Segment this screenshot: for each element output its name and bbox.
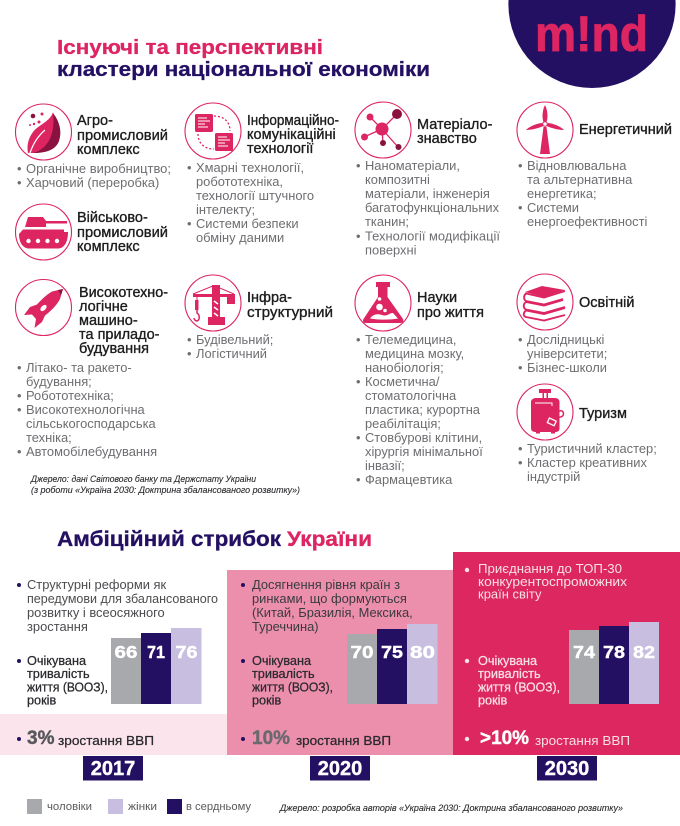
source note: clusters: (з роботи «Україна 2030: Доктрина збалансованого розвитку») xyxy=(31,485,300,495)
stat: GDP 10% xyxy=(241,728,391,749)
icon: tank xyxy=(16,204,72,260)
icon: suitcase xyxy=(517,384,573,440)
bar chart: 2030: 74 xyxy=(573,642,595,662)
icon: wind turbine xyxy=(517,102,573,158)
list: infrastructure items: • xyxy=(187,332,192,347)
list: materials items: матеріали, інженерія xyxy=(365,186,490,201)
text: emerging markets: ринками, що формуються xyxy=(252,591,407,606)
year: 2020: 2020 xyxy=(318,758,362,780)
list: life sciences items: • xyxy=(356,374,361,389)
stat: GDP 3%: зростання ВВП xyxy=(58,734,154,748)
list: agro items: • xyxy=(17,175,22,190)
stat: GDP 3% xyxy=(17,728,154,749)
heading: energy: Енергетичний xyxy=(579,122,672,138)
list: high-tech items: техніка; xyxy=(26,430,72,445)
text: life expectancy 2017: років xyxy=(27,694,56,708)
heading: tourism: Туризм xyxy=(579,406,627,422)
list: materials items: • xyxy=(356,228,361,244)
list: energy items: • xyxy=(518,200,523,215)
list: ICT items: обміну даними xyxy=(196,230,284,245)
text: life expectancy 2020: років xyxy=(252,694,281,708)
panel: energy cluster xyxy=(517,102,672,229)
bullet: reforms xyxy=(17,583,21,587)
list: life sciences items: хірургія мінімальної xyxy=(365,444,483,459)
list: energy items: Системи xyxy=(527,200,579,215)
list: tourism items: Туристичний кластер; xyxy=(527,441,657,456)
list: agro items: Органічне виробництво; xyxy=(26,161,171,176)
source note: leap: Джерело: розробка авторів «Україна 2030: Доктрина збалансованого розвитку» xyxy=(279,803,623,813)
year: 2020 xyxy=(310,756,370,780)
list: high-tech items: • xyxy=(17,402,22,417)
stat: GDP 10%: 10% xyxy=(252,728,290,749)
text: reforms: Структурні реформи як xyxy=(27,577,166,592)
heading: infrastructure: структурний xyxy=(247,305,333,321)
title: clusters xyxy=(57,36,430,81)
source note: clusters: Джерело: дані Світового банку та Держстату України xyxy=(30,474,256,484)
list: tourism items: • xyxy=(518,441,523,456)
icon: rocket xyxy=(16,280,72,336)
bullet: emerging markets xyxy=(241,583,245,587)
heading: ambitious leap: Амбіційний стрибок xyxy=(57,528,282,551)
list: ICT items: інтелекту; xyxy=(196,202,255,217)
icon: documents xyxy=(185,103,241,159)
list: materials items: багатофункціональних xyxy=(365,200,500,215)
bullet: life expectancy 2030 xyxy=(465,659,469,663)
list: high-tech items: сільськогосподарська xyxy=(26,416,157,431)
panel: 2020 xyxy=(227,570,453,755)
text: life expectancy 2017: Очікувана xyxy=(27,654,87,668)
list: materials items: поверхні xyxy=(365,242,416,258)
list: materials items: композитні xyxy=(365,172,430,187)
panel: 2030 xyxy=(453,552,680,755)
heading: infrastructure: Інфра- xyxy=(247,290,292,306)
bar chart: 2017 xyxy=(111,628,202,704)
list: life sciences items: • xyxy=(356,472,361,487)
logo: mind: m!nd xyxy=(535,6,648,62)
bar chart: 2017: 76 xyxy=(176,642,198,662)
text: reforms: передумови для збалансованого xyxy=(27,591,218,606)
list: education items: Дослідницькі xyxy=(527,332,604,347)
bar chart: 2017: 66 xyxy=(114,642,138,662)
list: education items: університети; xyxy=(527,346,607,361)
panel: materials science cluster xyxy=(355,102,500,258)
text: life expectancy 2017: життя (ВООЗ), xyxy=(27,680,108,694)
list: infrastructure items: Будівельний; xyxy=(196,332,273,347)
icon: books xyxy=(517,274,573,330)
bullet: life expectancy 2020 xyxy=(241,659,245,663)
panel: military-industrial cluster xyxy=(16,204,168,260)
list: life sciences items: реабілітація; xyxy=(365,416,441,431)
stat: GDP 3%: 3% xyxy=(27,728,55,749)
list: high-tech items: • xyxy=(17,360,22,375)
heading: materials: знавство xyxy=(417,131,477,147)
icon: flask xyxy=(355,275,411,331)
list: high-tech items: Високотехнологічна xyxy=(26,402,146,417)
heading: military: промисловий xyxy=(77,225,168,241)
text: reforms: зростання xyxy=(27,619,88,634)
list: education items: • xyxy=(518,332,523,347)
legend: жінки xyxy=(128,801,157,813)
list: life sciences items: • xyxy=(356,332,361,347)
panel: life sciences cluster xyxy=(355,275,484,487)
logo: mind xyxy=(508,0,676,88)
stat: GDP over 10%: >10% xyxy=(480,728,529,749)
list: life sciences items: нанобіологія; xyxy=(365,360,444,375)
list: education items: • xyxy=(518,360,523,375)
list: materials items: • xyxy=(356,158,361,173)
list: infrastructure items: Логістичний xyxy=(196,346,267,361)
panel: ICT cluster xyxy=(185,103,339,245)
text: top 30: Приєднання до ТОП-30 xyxy=(478,561,622,576)
list: education items: Бізнес-школи xyxy=(527,360,607,375)
list: agro items: • xyxy=(17,161,22,176)
icon: molecule xyxy=(355,102,411,158)
list: energy items: Відновлювальна xyxy=(527,158,627,173)
list: ICT items: технології штучного xyxy=(196,188,314,203)
icon: crane xyxy=(185,275,241,331)
heading: materials: Матеріало- xyxy=(417,117,493,133)
heading: life sciences: Науки xyxy=(417,290,457,306)
heading: life sciences: про життя xyxy=(417,305,484,321)
heading: military: Військово- xyxy=(77,210,148,226)
list: life sciences items: інвазії; xyxy=(365,458,405,473)
list: ICT items: • xyxy=(187,216,192,231)
list: life sciences items: пластика; курортна xyxy=(365,402,481,417)
text: reforms: розвитку і всеосяжного xyxy=(27,605,165,620)
legend: чоловіки xyxy=(47,801,92,813)
list: life sciences items: Стовбурові клітини, xyxy=(365,430,482,445)
legend: в сердньому xyxy=(186,801,251,813)
stat: GDP over 10%: зростання ВВП xyxy=(535,733,630,748)
bar chart: 2020: 70 xyxy=(350,642,374,662)
stat: GDP 10%: зростання ВВП xyxy=(296,734,391,748)
panel: education cluster xyxy=(517,274,634,375)
list: high-tech items: будування; xyxy=(26,374,92,389)
year: 2030: 2030 xyxy=(545,758,589,780)
year: 2017 xyxy=(83,756,143,780)
heading: high-tech: логічне xyxy=(79,299,128,315)
list: energy items: • xyxy=(518,158,523,173)
bar chart: 2020 xyxy=(347,624,438,704)
list: high-tech items: Автомобілебудування xyxy=(26,444,157,459)
heading: ICT: технології xyxy=(247,141,313,157)
list: energy items: енергетика; xyxy=(527,186,597,201)
text: emerging markets: (Китай, Бразилія, Мексика, xyxy=(252,605,413,620)
list: ICT items: Системи безпеки xyxy=(196,216,299,231)
bar chart: 2030: 82 xyxy=(633,642,655,662)
bar chart: 2017: 71 xyxy=(147,642,165,662)
bullet: life expectancy xyxy=(17,659,21,663)
bar chart: 2020: 75 xyxy=(381,642,403,662)
heading: ICT: Інформаційно- xyxy=(247,113,339,129)
list: life sciences items: Фармацевтика xyxy=(365,472,453,487)
heading: agro: промисловий xyxy=(77,128,168,144)
bullet: top 30 xyxy=(465,568,469,572)
legend xyxy=(27,799,251,814)
list: tourism items: індустрій xyxy=(527,469,580,484)
heading: high-tech: Високотехно- xyxy=(79,285,168,301)
icon: leaf xyxy=(16,104,72,160)
band: GDP 2017 xyxy=(0,714,227,755)
list: ICT items: • xyxy=(187,160,192,175)
list: life sciences items: Телемедицина, xyxy=(365,332,457,347)
text: top 30: конкурентоспроможних xyxy=(478,574,628,589)
text: life expectancy 2030: років xyxy=(478,694,507,708)
heading: education: Освітній xyxy=(579,295,634,311)
text: life expectancy 2020: тривалість xyxy=(252,667,315,681)
panel: high-tech machinery cluster xyxy=(16,280,168,459)
panel: agro-industrial cluster xyxy=(16,104,171,190)
text: life expectancy 2030: Очікувана xyxy=(478,654,538,668)
year: 2030 xyxy=(537,756,597,780)
heading: ICT: комунікаційні xyxy=(247,127,336,143)
title: clusters: кластери національної економіки xyxy=(57,58,430,81)
bar chart: 2030: 78 xyxy=(603,642,625,662)
heading: military: комплекс xyxy=(77,239,140,255)
heading: agro: Агро- xyxy=(77,113,113,129)
list: ICT items: робототехніка, xyxy=(196,174,283,189)
title: clusters: Існуючі та перспективні xyxy=(57,36,323,59)
list: materials items: тканин; xyxy=(365,214,409,229)
list: ICT items: Хмарні технології, xyxy=(196,160,304,175)
list: high-tech items: • xyxy=(17,444,22,459)
panel: 2017 xyxy=(0,577,227,755)
list: materials items: Наноматеріали, xyxy=(365,158,460,173)
list: materials items: Технології модифікації xyxy=(365,228,500,244)
text: life expectancy 2030: тривалість xyxy=(478,667,541,681)
bar chart: 2030 xyxy=(569,622,659,704)
list: life sciences items: стоматологічна xyxy=(365,388,457,403)
list: tourism items: Кластер креативних xyxy=(527,455,647,470)
text: emerging markets: Досягнення рівня країн з xyxy=(252,577,400,592)
bar chart: 2020: 80 xyxy=(410,642,435,662)
list: high-tech items: Робототехніка; xyxy=(26,388,114,403)
list: agro items: Харчовий (переробка) xyxy=(26,175,159,190)
panel: infrastructure cluster xyxy=(185,275,333,361)
list: life sciences items: • xyxy=(356,430,361,445)
year: 2017: 2017 xyxy=(91,758,135,780)
text: life expectancy 2020: Очікувана xyxy=(252,654,312,668)
list: high-tech items: Літако- та ракето- xyxy=(26,360,132,375)
list: energy items: енергоефективності xyxy=(527,214,647,229)
text: top 30: країн світу xyxy=(478,586,542,602)
list: tourism items: • xyxy=(518,455,523,470)
text: life expectancy 2020: життя (ВООЗ), xyxy=(252,680,333,694)
panel: tourism cluster xyxy=(517,384,657,484)
text: life expectancy 2017: тривалість xyxy=(27,667,90,681)
heading: agro: комплекс xyxy=(77,142,140,158)
heading: high-tech: та приладо- xyxy=(79,327,160,343)
text: emerging markets: Туреччина) xyxy=(252,619,319,634)
list: infrastructure items: • xyxy=(187,346,192,361)
text: life expectancy 2030: життя (ВООЗ), xyxy=(478,680,560,694)
heading: high-tech: будування xyxy=(79,341,149,357)
list: life sciences items: медицина мозку, xyxy=(365,346,464,361)
list: life sciences items: Косметична/ xyxy=(365,374,440,389)
list: energy items: та альтернативна xyxy=(527,172,633,187)
list: high-tech items: • xyxy=(17,388,22,403)
heading: high-tech: машино- xyxy=(79,313,138,329)
heading: ambitious leap: України xyxy=(287,528,372,551)
stat: GDP over 10% xyxy=(465,728,630,749)
